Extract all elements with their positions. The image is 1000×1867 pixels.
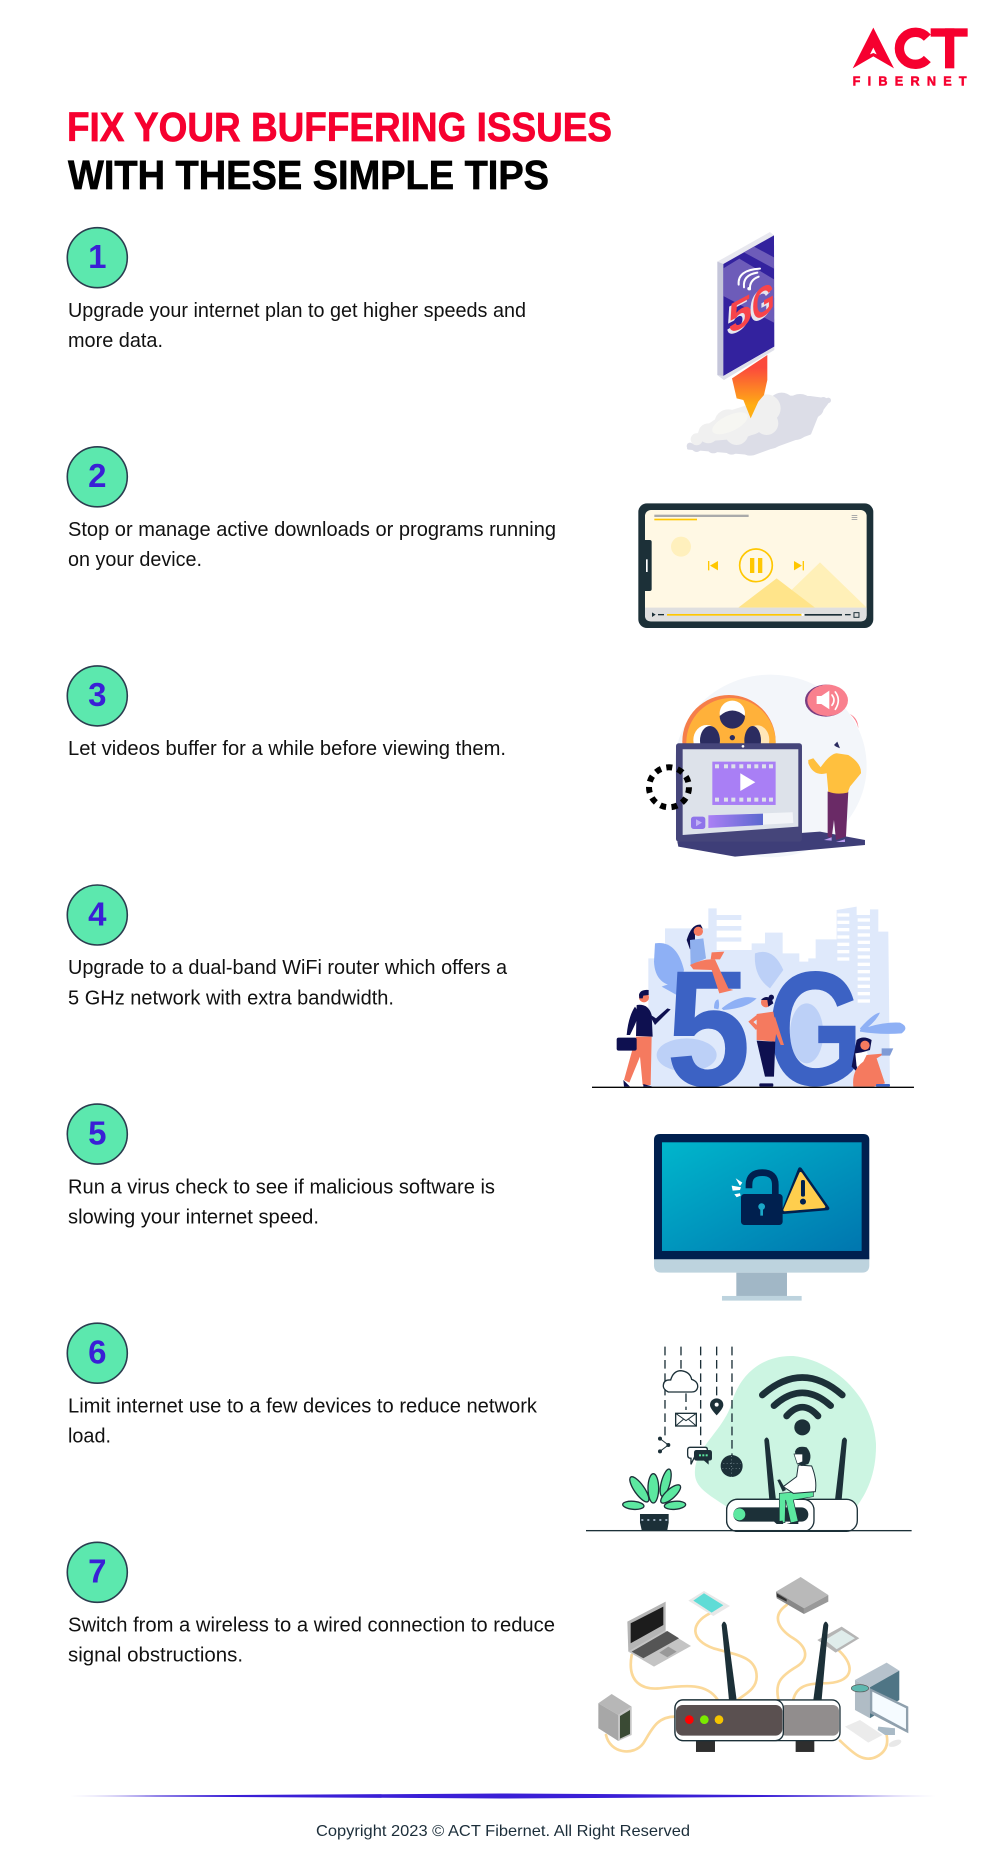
- illustration: monitor with lock and warning: [654, 1134, 869, 1301]
- logo: ACT Fibernet: [853, 28, 968, 89]
- tip 2: 2: [88, 457, 106, 494]
- tip 3: 3: [88, 676, 106, 713]
- illustration: 5G phone rocket: 5: [726, 287, 750, 347]
- tip 6: 6: [88, 1334, 106, 1370]
- title: FIX YOUR BUFFERING ISSUES: [67, 104, 612, 150]
- tip 6: [67, 1323, 538, 1448]
- illustration: router with person and network icons: [586, 1347, 912, 1531]
- illustration: 5G phone rocket: [687, 232, 831, 456]
- tip 2: on your device.: [68, 548, 202, 571]
- illustration: 5G city with people: 5: [666, 936, 751, 1121]
- tip 7: Switch from a wireless to a wired connection to reduce: [68, 1614, 555, 1636]
- tip 4: 4: [88, 895, 107, 932]
- tip 6: load.: [68, 1425, 111, 1448]
- title: WITH THESE SIMPLE TIPS: [68, 152, 549, 198]
- tip 4: 5 GHz network with extra bandwidth.: [68, 986, 394, 1009]
- footer copyright: Copyright 2023 © ACT Fibernet. All Right Reserved: [316, 1823, 690, 1840]
- tip 1: Upgrade your internet plan to get higher speeds and: [68, 299, 526, 322]
- footer rule: [69, 1794, 937, 1798]
- illustration: 5G phone rocket: 5: [728, 284, 752, 344]
- tip 1: more data.: [68, 329, 163, 352]
- illustration: 5G phone rocket: G: [749, 276, 772, 335]
- tip 3: Let videos buffer for a while before viewing them.: [68, 737, 506, 760]
- illustration: 5G city with people: [592, 907, 914, 1121]
- tip 6: Limit internet use to a few devices to reduce network: [68, 1394, 538, 1417]
- tip 7: signal obstructions.: [68, 1644, 243, 1667]
- tip 5: Run a virus check to see if malicious software is: [68, 1175, 495, 1198]
- tip 4: Upgrade to a dual-band WiFi router which offers a: [68, 956, 508, 979]
- tip 2: [67, 447, 556, 571]
- tip 5: slowing your internet speed.: [68, 1206, 319, 1228]
- tip 7: [67, 1542, 555, 1667]
- tip 5: 5: [88, 1114, 106, 1151]
- illustration: 5G city with people: G: [767, 937, 863, 1120]
- illustration: wired router connected to devices: [598, 1577, 908, 1759]
- tip 1: 1: [88, 238, 106, 275]
- illustration: 5G phone rocket: G: [752, 273, 775, 332]
- tip 1: [67, 228, 526, 352]
- title: [67, 104, 612, 198]
- tip 7: 7: [88, 1553, 106, 1590]
- illustration: laptop video with film reel and person: [649, 675, 867, 857]
- tip 3: [67, 666, 506, 760]
- illustration: video player on phone: [638, 503, 873, 628]
- tip 4: [67, 885, 508, 1009]
- logo: ACT Fibernet: FIBERNET: [853, 75, 967, 89]
- tip 2: Stop or manage active downloads or programs running: [68, 518, 556, 541]
- tip 5: [67, 1104, 495, 1228]
